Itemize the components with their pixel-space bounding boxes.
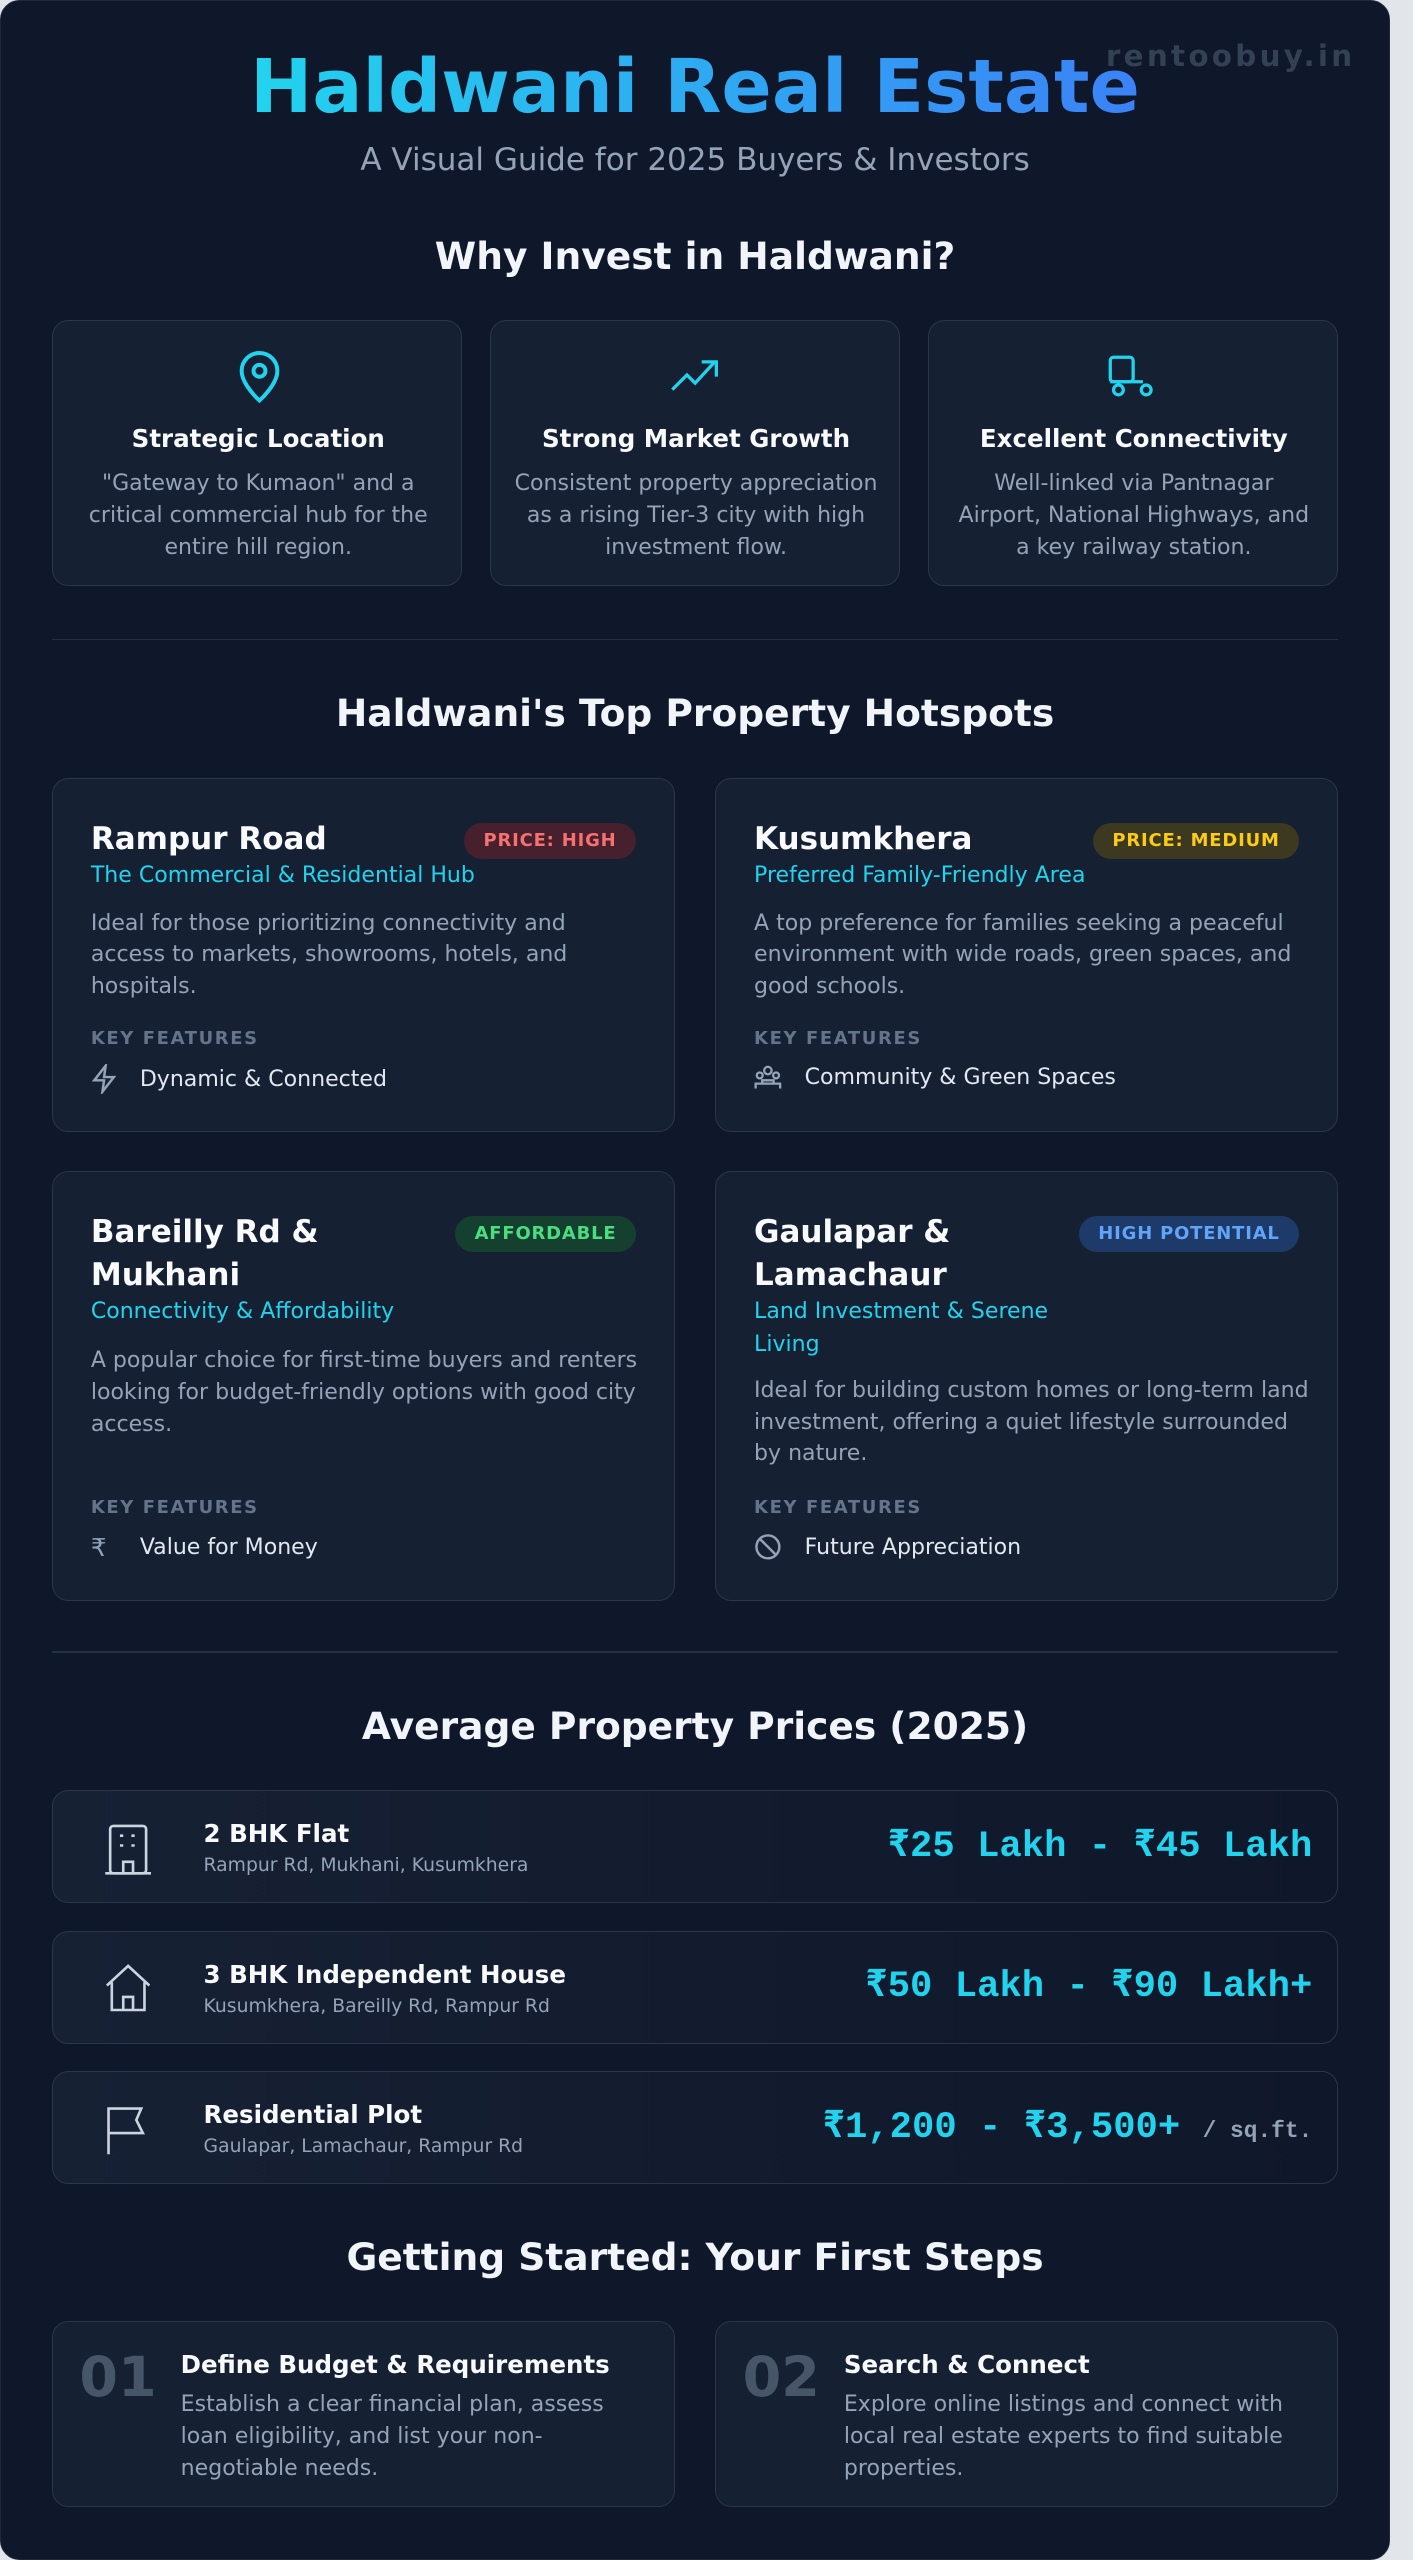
- panel: bareilly rd: ₹: [91, 1533, 106, 1562]
- panel: strategic location: Strategic Location: [132, 424, 385, 453]
- price row: 3bhk: 3 BHK Independent House: [204, 1960, 566, 1989]
- watermark: rentoobuy.in: [1106, 39, 1355, 73]
- panel: kusumkhera: Preferred Family-Friendly Area: [754, 863, 1085, 888]
- price row: 2bhk: [52, 1790, 1338, 1903]
- step 02: Search & Connect: [844, 2350, 1090, 2379]
- panel: kusumkhera: PRICE: MEDIUM: [1112, 830, 1280, 851]
- panel: gaulapar: Ideal for building custom homes or long-term land investment, offering a quiet lifestyle surrounded by nature.: [754, 1378, 1309, 1466]
- panel: gaulapar: KEY FEATURES: [754, 1497, 922, 1518]
- panel: market growth: Consistent property appreciation as a rising Tier-3 city with high investment flow.: [515, 471, 877, 560]
- panel: gaulapar: Future Appreciation: [805, 1535, 1021, 1560]
- panel: bareilly rd: Mukhani: [91, 1257, 240, 1293]
- panel: gaulapar: HIGH POTENTIAL: [1098, 1223, 1280, 1244]
- panel: kusumkhera: KEY FEATURES: [754, 1028, 922, 1049]
- panel: market growth: [490, 320, 900, 586]
- price row: 3bhk: Kusumkhera, Bareilly Rd, Rampur Rd: [204, 1996, 550, 2016]
- panel: bareilly rd: Bareilly Rd &: [91, 1214, 319, 1250]
- panel: kusumkhera: Community & Green Spaces: [805, 1065, 1116, 1090]
- heading: first steps: Getting Started: Your First Steps: [346, 2235, 1044, 2279]
- panel: kusumkhera: [715, 778, 1338, 1132]
- panel: rampur road: Dynamic & Connected: [140, 1067, 387, 1092]
- panel: gaulapar: [715, 1171, 1338, 1601]
- panel: rampur road: Rampur Road: [91, 821, 327, 857]
- step 01: [52, 2321, 675, 2507]
- price row: plot: ₹1,200 - ₹3,500+ / sq.ft.: [823, 2107, 1312, 2149]
- panel: bareilly rd: Value for Money: [140, 1535, 318, 1560]
- panel: rampur road: [52, 778, 675, 1132]
- price row: plot: [52, 2071, 1338, 2184]
- heading: prices: Average Property Prices (2025): [362, 1704, 1028, 1748]
- panel: connectivity: Excellent Connectivity: [980, 424, 1288, 453]
- price row: 3bhk: [52, 1931, 1338, 2044]
- heading: why invest: Why Invest in Haldwani?: [435, 234, 955, 278]
- panel: strategic location: "Gateway to Kumaon" and a critical commercial hub for the entire hill region.: [89, 471, 428, 560]
- panel: rampur road: KEY FEATURES: [91, 1028, 259, 1049]
- icon: pin: [240, 351, 280, 404]
- price row: 2bhk: ₹25 Lakh - ₹45 Lakh: [888, 1826, 1312, 1868]
- price row: 3bhk: ₹50 Lakh - ₹90 Lakh+: [865, 1966, 1312, 2008]
- heading: hotspots: Haldwani's Top Property Hotspots: [336, 691, 1054, 735]
- step 02: [715, 2321, 1338, 2507]
- panel: bareilly rd: A popular choice for first-time buyers and renters looking for budget-friendly options with good city access.: [91, 1348, 637, 1437]
- panel: bareilly rd: KEY FEATURES: [91, 1497, 259, 1518]
- panel: kusumkhera: Kusumkhera: [754, 821, 972, 857]
- price row: plot: Gaulapar, Lamachaur, Rampur Rd: [204, 2136, 523, 2157]
- step 01: Define Budget & Requirements: [181, 2350, 610, 2379]
- panel: market growth: Strong Market Growth: [542, 424, 850, 453]
- panel: gaulapar: Lamachaur: [754, 1257, 947, 1293]
- step 02: Explore online listings and connect with local real estate experts to find suitable properties.: [844, 2392, 1283, 2481]
- price row: plot: Residential Plot: [204, 2100, 422, 2129]
- panel: strategic location: [52, 320, 462, 586]
- panel: gaulapar: Land Investment & Serene Living: [754, 1299, 1048, 1357]
- icon: trend: [671, 360, 718, 391]
- panel: bareilly rd: [52, 1171, 675, 1601]
- panel: gaulapar: Gaulapar &: [754, 1214, 950, 1250]
- panel: connectivity: Well-linked via Pantnagar Airport, National Highways, and a key railway station.: [958, 471, 1309, 560]
- panel: bareilly rd: Connectivity & Affordability: [91, 1299, 394, 1324]
- step 02: 02: [743, 2345, 820, 2410]
- panel: rampur road: Ideal for those prioritizing connectivity and access to markets, showrooms, hotels, and hospitals.: [91, 911, 567, 999]
- panel: connectivity: [928, 320, 1338, 586]
- step 01: Establish a clear financial plan, assess loan eligibility, and list your non-negotiable needs.: [181, 2392, 604, 2481]
- panel: bareilly rd: AFFORDABLE: [475, 1223, 616, 1244]
- price row: 2bhk: 2 BHK Flat: [204, 1819, 349, 1848]
- panel: rampur road: The Commercial & Residential Hub: [91, 863, 475, 888]
- title: Haldwani Real Estate: [250, 43, 1140, 130]
- icon: vehicle: [1108, 356, 1153, 396]
- panel: kusumkhera: A top preference for families seeking a peaceful environment with wide roads, green spaces, and good schools.: [754, 911, 1291, 999]
- price row: 2bhk: Rampur Rd, Mukhani, Kusumkhera: [204, 1855, 528, 1876]
- step 01: 01: [79, 2345, 157, 2410]
- subtitle: A Visual Guide for 2025 Buyers & Investors: [360, 142, 1030, 178]
- panel: rampur road: PRICE: HIGH: [483, 830, 616, 851]
